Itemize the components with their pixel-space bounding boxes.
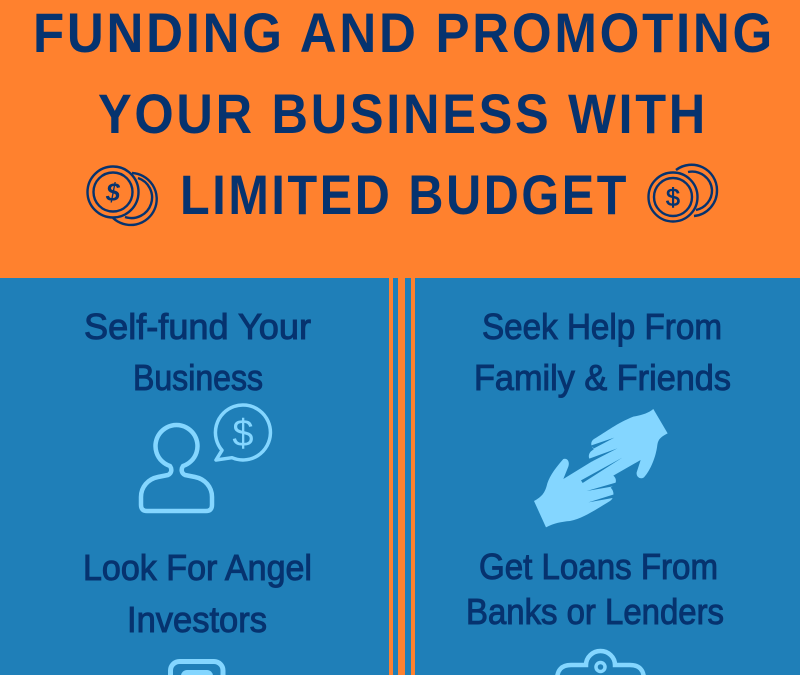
icon: angel investor card xyxy=(170,662,223,675)
icon: person with dollar speech bubble: $ xyxy=(232,413,254,455)
icon: coins right: $ xyxy=(666,184,680,212)
heading: angel investors xyxy=(83,547,312,640)
heading: loans: Get Loans From xyxy=(479,546,718,587)
heading: loans xyxy=(466,546,724,632)
icon: person with dollar speech bubble xyxy=(141,405,270,511)
heading: angel investors: Look For Angel xyxy=(83,547,312,588)
centre divider stripes xyxy=(389,278,415,675)
panel: blue background xyxy=(0,278,800,675)
icon: reaching hands xyxy=(534,409,668,527)
heading: loans: Banks or Lenders xyxy=(466,591,724,632)
title: YOUR BUSINESS WITH xyxy=(98,82,708,145)
heading: self-fund: Business xyxy=(133,357,263,398)
heading: self-fund: Self-fund Your xyxy=(84,306,311,347)
heading: family and friends xyxy=(474,306,731,398)
icon: bank loan briefcase xyxy=(557,651,644,675)
panel: orange header xyxy=(0,0,800,278)
title xyxy=(33,1,775,226)
icon: coins left xyxy=(88,166,157,225)
heading: self-fund xyxy=(84,306,311,398)
heading: family and friends: Seek Help From xyxy=(482,306,722,347)
title: LIMITED BUDGET xyxy=(180,163,629,226)
icon: coins right xyxy=(648,165,717,222)
icon: coins left: $ xyxy=(105,179,121,207)
heading: angel investors: Investors xyxy=(127,599,267,640)
heading: family and friends: Family & Friends xyxy=(474,357,731,398)
